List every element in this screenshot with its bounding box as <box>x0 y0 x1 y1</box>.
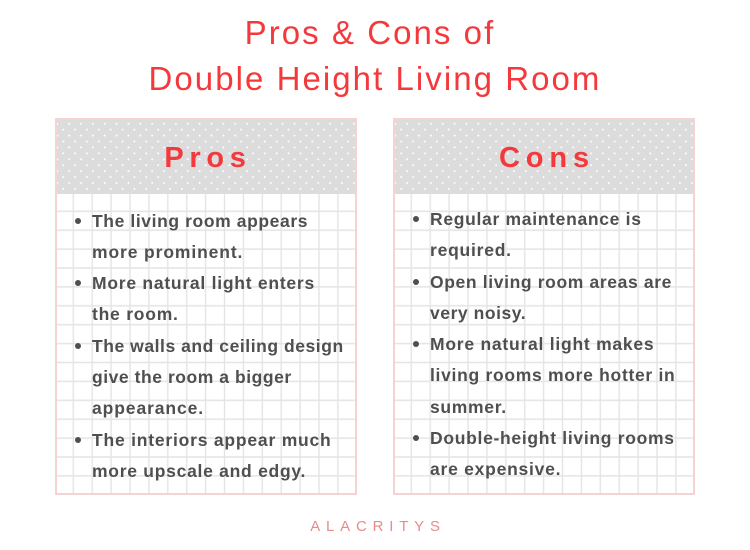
list: pros: The walls and ceiling design <box>92 336 344 356</box>
list: pros: The living room appears <box>92 211 308 231</box>
panel: cons <box>393 118 695 495</box>
list: pros: more prominent. <box>92 242 243 262</box>
list: cons: Double-height living rooms <box>430 428 675 448</box>
title: Pros & Cons of <box>245 14 495 51</box>
list: cons: summer. <box>430 397 507 417</box>
list: pros: More natural light enters <box>92 273 315 293</box>
list: cons: Open living room areas are <box>430 272 672 292</box>
footer brand: ALACRITYS <box>310 518 446 535</box>
heading: cons: Cons <box>499 142 595 174</box>
list: pros: the room. <box>92 304 179 324</box>
list: cons: living rooms more hotter in <box>430 365 675 385</box>
title: Double Height Living Room <box>148 60 601 97</box>
list: cons: More natural light makes <box>430 334 654 354</box>
list: cons: are expensive. <box>430 459 561 479</box>
panel: pros <box>55 118 357 495</box>
list: cons: required. <box>430 240 512 260</box>
list: cons: Regular maintenance is <box>430 209 642 229</box>
list: cons <box>413 209 675 479</box>
list: pros: give the room a bigger <box>92 367 292 387</box>
title <box>148 14 601 97</box>
list: cons: very noisy. <box>430 303 526 323</box>
list: pros: The interiors appear much <box>92 430 332 450</box>
list: pros: appearance. <box>92 398 204 418</box>
list: pros: more upscale and edgy. <box>92 461 306 481</box>
heading: pros: Pros <box>164 142 252 174</box>
list: pros <box>75 211 344 481</box>
